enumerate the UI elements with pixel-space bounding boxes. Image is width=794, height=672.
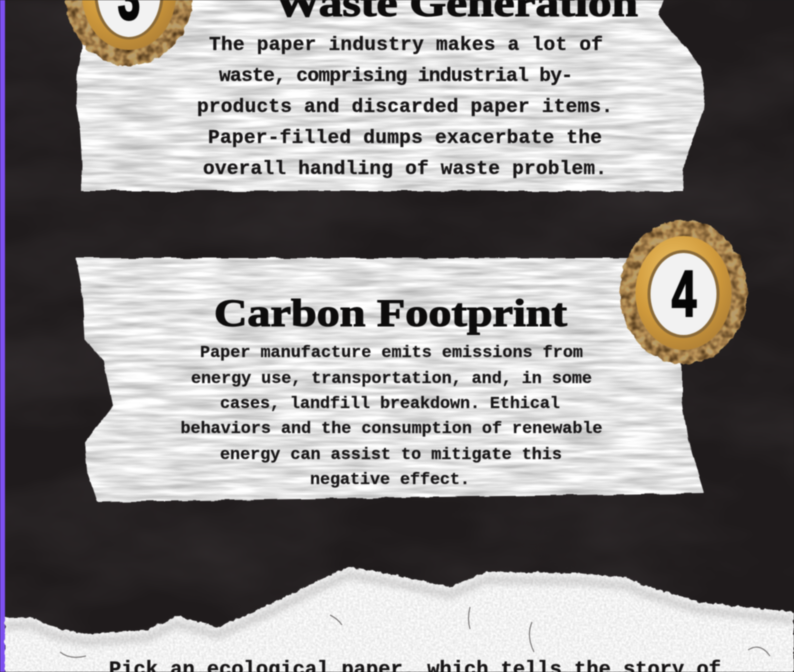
text block: waste generation description: products and discarded paper items. bbox=[197, 96, 613, 118]
grey shading along torn edge bbox=[5, 575, 794, 642]
text block: carbon footprint description: energy can assist to mitigate this bbox=[220, 446, 562, 465]
panel: waste generation bbox=[76, 0, 705, 191]
text block: carbon footprint description: Paper manufacture emits emissions from bbox=[200, 344, 583, 363]
icon: gold frame number 3 bbox=[65, 0, 193, 66]
icon: gold frame number 4 bbox=[620, 220, 748, 364]
panel: closing torn paper bbox=[5, 567, 794, 672]
text block: carbon footprint description: behaviors and the consumption of renewable bbox=[180, 420, 602, 439]
text block: waste generation description: waste, comprising industrial by- bbox=[219, 65, 573, 87]
text block: waste generation description: overall handling of waste problem. bbox=[203, 158, 607, 180]
panel: carbon footprint bbox=[76, 258, 704, 502]
text block: carbon footprint description: energy use, transportation, and, in some bbox=[191, 370, 592, 389]
paper fibre marks bbox=[60, 607, 770, 657]
text block: waste generation description bbox=[197, 34, 613, 180]
paper strip: carbon footprint bbox=[76, 258, 704, 502]
text block: carbon footprint description: cases, landfill breakdown. Ethical bbox=[220, 395, 560, 414]
text block: carbon footprint description: negative effect. bbox=[310, 471, 470, 490]
heading: carbon footprint: Carbon Footprint bbox=[214, 292, 567, 335]
text block: carbon footprint description bbox=[180, 344, 602, 490]
number 4: 4 bbox=[672, 258, 696, 330]
torn white paper bbox=[5, 567, 794, 672]
paper strip: waste generation bbox=[76, 0, 705, 191]
text block: waste generation description: The paper industry makes a lot of bbox=[209, 34, 603, 56]
purple left edge line bbox=[0, 0, 5, 672]
text block: waste generation description: Paper-filled dumps exacerbate the bbox=[208, 127, 602, 149]
